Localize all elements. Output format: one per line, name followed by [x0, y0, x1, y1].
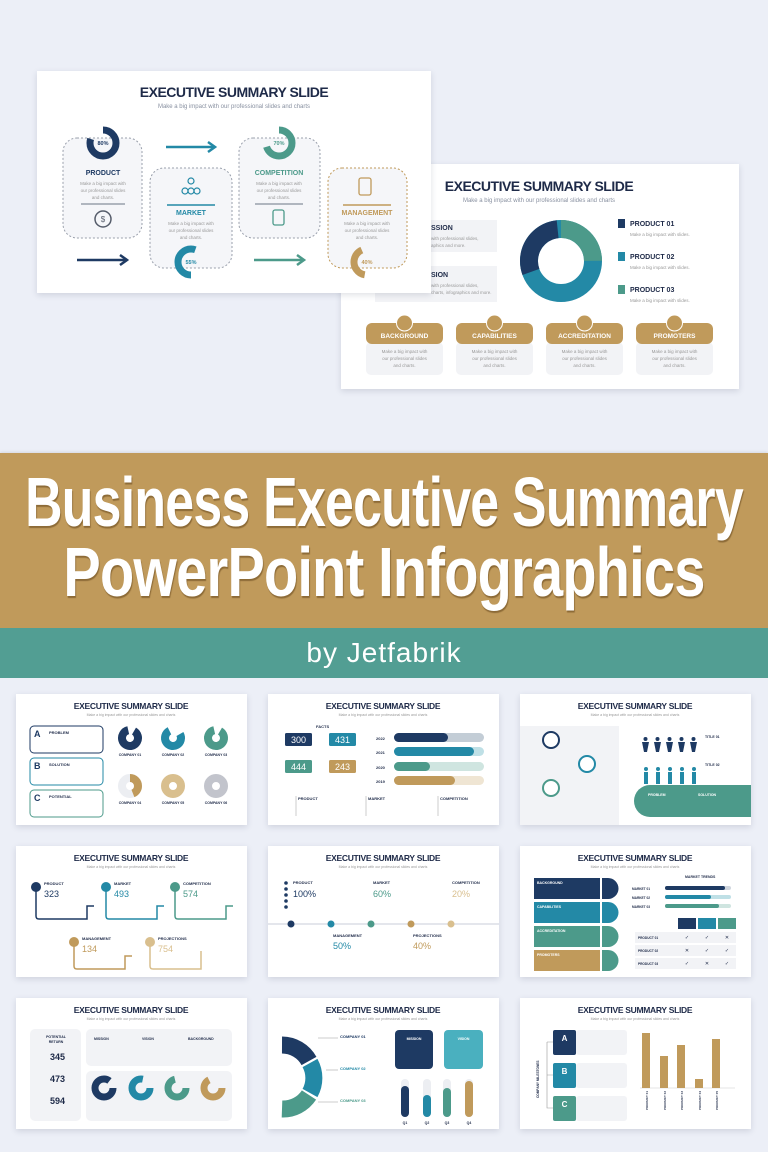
card: market: MARKET [176, 210, 207, 217]
thumbnail 6: colored bars + table: PRODUCT 01 [638, 936, 658, 940]
thumbnail 4: numbers path: 754 [158, 944, 173, 954]
card: market: 55% [185, 260, 197, 266]
banner: title: PowerPoint Infographics [63, 533, 705, 611]
thumbnail 9: milestones + bar chart: A [562, 1034, 568, 1043]
thumbnail 4: numbers path: 134 [82, 944, 97, 954]
legend: PRODUCT 03 [630, 287, 674, 294]
card: management: our professional slides [345, 228, 390, 233]
thumbnail 1: ABC + donuts: POTENTIAL [49, 794, 72, 799]
gold cards: and charts. [393, 363, 416, 368]
thumbnail 1: ABC + donuts: B [34, 761, 41, 771]
thumbnail 7: potential return + donuts: BACKGROUND [188, 1037, 214, 1041]
thumbnail 4: numbers path: COMPETITION [183, 881, 211, 886]
thumbnail 3: people icons: SOLUTION [698, 793, 717, 797]
thumbnail 5: timeline percentages: Make a big impact with our professional slides and charts [339, 865, 428, 869]
thumbnail 7: potential return + donuts: MISSION [94, 1037, 109, 1041]
thumbnail 7: potential return + donuts: RETURN [49, 1040, 64, 1044]
banner: title: Business Executive Summary [25, 463, 743, 541]
card: market [150, 168, 232, 275]
card: product: 80% [97, 141, 109, 147]
thumbnail 3: people icons: PROBLEM [648, 793, 666, 797]
thumbnail 4: numbers path: PRODUCT [44, 881, 64, 886]
thumbnail 2: facts + bars [268, 694, 499, 825]
thumbnail 1: ABC + donuts: COMPANY 01 [119, 753, 141, 757]
thumbnail 2: facts + bars: FACTS [316, 724, 329, 729]
thumbnail 2: facts + bars: 431 [335, 735, 350, 745]
thumbnail 2: facts + bars: MARKET [368, 796, 386, 801]
banner: author: by Jetfabrik [306, 637, 462, 668]
gold cards: our professional slides [562, 356, 608, 361]
arrow: bottom navy [77, 255, 127, 265]
thumbnail 9: milestones + bar chart: B [562, 1067, 568, 1076]
legend [618, 219, 690, 303]
card: product: our professional slides [81, 188, 126, 193]
thumbnail 4: numbers path: PROJECTIONS [158, 936, 187, 941]
thumbnail 5: timeline percentages: COMPETITION [452, 880, 480, 885]
thumbnail 8: half donut + mission/vision + pills: Q1 [403, 1121, 407, 1125]
thumbnail 1: ABC + donuts: PROBLEM [49, 730, 70, 735]
thumbnail 2: facts + bars: 2022 [376, 736, 386, 741]
thumbnail 3: people icons: Make a big impact with our professional slides and charts [591, 713, 680, 717]
card: market: and charts. [180, 235, 202, 240]
thumbnail 1: ABC + donuts: COMPANY 03 [205, 753, 227, 757]
card: market: Make a big impact with [168, 221, 214, 226]
card: product: $ [101, 215, 106, 224]
thumbnail 7: potential return + donuts: 345 [50, 1052, 65, 1062]
card: management: MANAGEMENT [342, 210, 393, 217]
gold cards: our professional slides [382, 356, 428, 361]
thumbnail 7: potential return + donuts [16, 998, 247, 1129]
gold cards: Make a big impact with [562, 349, 608, 354]
thumbnail 2: facts + bars: Make a big impact with our professional slides and charts [339, 713, 428, 717]
thumbnail 1: ABC + donuts: A [34, 729, 41, 739]
gold cards: Make a big impact with [382, 349, 428, 354]
thumbnail 5: timeline percentages: 50% [333, 941, 351, 951]
thumbnail 9: milestones + bar chart: PRODUCT 01 [645, 1091, 649, 1110]
thumbnail 5: timeline percentages [268, 846, 499, 977]
thumbnail 6: colored bars + table: MARKET 01 [632, 887, 650, 891]
card: product: and charts. [92, 195, 114, 200]
mission boxes: SSION [431, 225, 453, 232]
thumbnail 7: potential return + donuts: 594 [50, 1096, 65, 1106]
thumbnail 6: colored bars + table [520, 846, 751, 977]
slide: top right executive summary with donut [341, 164, 739, 389]
donut chart [520, 220, 602, 302]
card: management: Make a big impact with [344, 221, 390, 226]
gold cards: ACCREDITATION [558, 333, 611, 340]
thumbnail 5: timeline percentages: 60% [373, 889, 391, 899]
thumbnail 6: colored bars + table: MARKET TRENDS [685, 875, 716, 879]
thumbnail 8: half donut + mission/vision + pills: VISION [458, 1037, 470, 1041]
thumbnail 4: numbers path: Make a big impact with our professional slides and charts [87, 865, 176, 869]
thumbnail 2: facts + bars: 2021 [376, 750, 386, 755]
thumbnail 9: milestones + bar chart [520, 998, 751, 1129]
thumbnail 6: colored bars + table: PRODUCT 03 [638, 962, 658, 966]
thumbnail 5: timeline percentages: 100% [293, 889, 316, 899]
thumbnail 1: ABC + donuts: COMPANY 02 [162, 753, 184, 757]
thumbnail 6: colored bars + table: ✓ [705, 948, 709, 954]
thumbnail 9: milestones + bar chart: PRODUCT 04 [698, 1091, 702, 1110]
card: competition: our professional slides [257, 188, 302, 193]
thumbnail 6: colored bars + table: MARKET 03 [632, 905, 650, 909]
legend: Make a big impact with slides. [630, 232, 690, 237]
gold cards: BACKGROUND [381, 333, 429, 340]
mission boxes [375, 220, 497, 302]
thumbnail 7: potential return + donuts: VISION [142, 1037, 154, 1041]
thumbnail 1: ABC + donuts: COMPANY 05 [162, 801, 184, 805]
thumbnail 3: people icons [520, 694, 751, 825]
slide title [140, 84, 328, 110]
card: market: our professional slides [169, 228, 214, 233]
thumbnail 5: timeline percentages: MARKET [373, 880, 391, 885]
thumbnail 6: colored bars + table: CAPABILITIES [537, 905, 562, 909]
thumbnail 9: milestones + bar chart: PRODUCT 02 [663, 1091, 667, 1110]
thumbnail 1: ABC + donuts: Make a big impact with our professional slides and charts [87, 713, 176, 717]
gold cards: our professional slides [652, 356, 698, 361]
thumbnail 5: timeline percentages: PROJECTIONS [413, 933, 442, 938]
gold cards: and charts. [573, 363, 596, 368]
thumbnail 7: potential return + donuts: Make a big impact with our professional slides and charts [87, 1017, 176, 1021]
legend: Make a big impact with slides. [630, 265, 690, 270]
thumbnail 2: facts + bars: 444 [291, 762, 306, 772]
thumbnail 9: milestones + bar chart: Make a big impact with our professional slides and charts [591, 1017, 680, 1021]
thumbnail 6: colored bars + table: ✓ [725, 948, 729, 954]
thumbnail 2: facts + bars: EXECUTIVE SUMMARY SLIDE [326, 701, 441, 711]
slide title: Make a big impact with our professional slides and charts [158, 104, 310, 110]
thumbnail 9: milestones + bar chart: PRODUCT 05 [715, 1091, 719, 1110]
thumbnail 2: facts + bars: COMPETITION [440, 796, 468, 801]
mission boxes: charts, infographics and more. [431, 290, 492, 295]
thumbnail 6: colored bars + table: MARKET 02 [632, 896, 650, 900]
slide title: EXECUTIVE SUMMARY SLIDE [445, 178, 633, 194]
thumbnail 4: numbers path: EXECUTIVE SUMMARY SLIDE [74, 853, 189, 863]
card: competition: and charts. [268, 195, 290, 200]
slide title: EXECUTIVE SUMMARY SLIDE [140, 84, 328, 100]
gold cards: and charts. [483, 363, 506, 368]
thumbnail 4: numbers path: 574 [183, 889, 198, 899]
thumbnail 5: timeline percentages: EXECUTIVE SUMMARY SLIDE [326, 853, 441, 863]
thumbnail 6: colored bars + table: ✓ [705, 935, 709, 941]
thumbnail 8: half donut + mission/vision + pills: Q2 [425, 1121, 429, 1125]
mission boxes: with professional slides, [431, 236, 479, 241]
thumbnail 8: half donut + mission/vision + pills: COMPANY 02 [340, 1066, 366, 1071]
card: management [328, 168, 407, 277]
banner: title [0, 453, 768, 628]
thumbnail 6: colored bars + table: ACCREDITATION [537, 929, 566, 933]
thumbnail 3: people icons: TITLE 02 [705, 763, 720, 767]
thumbnail 6: colored bars + table: BACKGROUND [537, 881, 563, 885]
thumbnail 9: milestones + bar chart: PRODUCT 03 [680, 1091, 684, 1110]
card: competition: 70% [273, 141, 285, 147]
thumbnail 3: people icons: TITLE 01 [705, 735, 720, 739]
legend: PRODUCT 02 [630, 254, 674, 261]
mission boxes: with professional slides, [431, 283, 479, 288]
thumbnail 6: colored bars + table: Make a big impact with our professional slides and charts [591, 865, 680, 869]
thumbnail 8: half donut + mission/vision + pills: Q3 [445, 1121, 449, 1125]
card: product [63, 130, 142, 238]
slide title: Make a big impact with our professional slides and charts [463, 198, 615, 204]
slide title [445, 178, 633, 204]
thumbnail 3: people icons: EXECUTIVE SUMMARY SLIDE [578, 701, 693, 711]
thumbnail 4: numbers path: MARKET [114, 881, 132, 886]
thumbnail 4: numbers path: MANAGEMENT [82, 936, 112, 941]
thumbnail 5: timeline percentages: PRODUCT [293, 880, 313, 885]
thumbnail 9: milestones + bar chart: EXECUTIVE SUMMARY SLIDE [578, 1005, 693, 1015]
thumbnail 6: colored bars + table: ✓ [725, 961, 729, 967]
thumbnail 2: facts + bars: 300 [291, 735, 306, 745]
arrow: top teal [166, 142, 215, 152]
thumbnail 4: numbers path: 323 [44, 889, 59, 899]
card: management: 40% [361, 260, 373, 266]
thumbnail 8: half donut + mission/vision + pills: EXECUTIVE SUMMARY SLIDE [326, 1005, 441, 1015]
thumbnail 6: colored bars + table: EXECUTIVE SUMMARY SLIDE [578, 853, 693, 863]
banner: author [0, 628, 768, 678]
thumbnail 5: timeline percentages: MANAGEMENT [333, 933, 363, 938]
thumbnail 1: ABC + donuts: C [34, 793, 41, 803]
card: competition: Make a big impact with [256, 181, 302, 186]
thumbnail 4: numbers path: 493 [114, 889, 129, 899]
thumbnail 2: facts + bars: 243 [335, 762, 350, 772]
thumbnail 7: potential return + donuts: 473 [50, 1074, 65, 1084]
thumbnail 8: half donut + mission/vision + pills: Make a big impact with our professional slides and charts [339, 1017, 428, 1021]
thumbnail 4: numbers path [16, 846, 247, 977]
thumbnail 6: colored bars + table: ✕ [705, 961, 709, 967]
thumbnail 5: timeline percentages: 20% [452, 889, 470, 899]
arrow: bottom teal [254, 255, 304, 265]
card: competition [239, 130, 320, 238]
thumbnail 8: half donut + mission/vision + pills: MISSION [407, 1037, 422, 1041]
thumbnail 6: colored bars + table: ✕ [685, 948, 689, 954]
mission boxes: aphics and more. [431, 243, 466, 248]
thumbnail 6: colored bars + table: PRODUCT 02 [638, 949, 658, 953]
gold cards: PROMOTERS [654, 333, 696, 340]
thumbnail 6: colored bars + table: ✓ [685, 961, 689, 967]
thumbnail 2: facts + bars: 2019 [376, 779, 386, 784]
thumbnail 6: colored bars + table: PROMOTERS [537, 953, 560, 957]
card: competition: COMPETITION [255, 170, 303, 177]
thumbnail 7: potential return + donuts: EXECUTIVE SUMMARY SLIDE [74, 1005, 189, 1015]
mission boxes: SION [431, 272, 448, 279]
card: management: and charts. [356, 235, 378, 240]
thumbnail 5: timeline percentages: 40% [413, 941, 431, 951]
gold cards: CAPABILITIES [472, 333, 517, 340]
legend: PRODUCT 01 [630, 221, 674, 228]
thumbnail 1: ABC + donuts [16, 694, 247, 825]
card: product: Make a big impact with [80, 181, 126, 186]
thumbnail 8: half donut + mission/vision + pills [268, 998, 499, 1129]
gold cards [366, 315, 713, 375]
card: product: PRODUCT [86, 170, 121, 177]
thumbnail 8: half donut + mission/vision + pills: Q4 [467, 1121, 471, 1125]
thumbnail 9: milestones + bar chart: C [562, 1100, 568, 1109]
gold cards: Make a big impact with [652, 349, 698, 354]
gold cards: and charts. [663, 363, 686, 368]
legend: Make a big impact with slides. [630, 298, 690, 303]
thumbnail 9: milestones + bar chart: COMPANY MILESTONES [536, 1060, 540, 1098]
gold cards: Make a big impact with [472, 349, 518, 354]
thumbnail 2: facts + bars: PRODUCT [298, 796, 318, 801]
thumbnail 6: colored bars + table: ✕ [725, 935, 729, 941]
thumbnail 1: ABC + donuts: EXECUTIVE SUMMARY SLIDE [74, 701, 189, 711]
gold cards: our professional slides [472, 356, 518, 361]
thumbnail 6: colored bars + table: ✓ [685, 935, 689, 941]
thumbnail 1: ABC + donuts: SOLUTION [49, 762, 70, 767]
slide: top left executive summary [37, 71, 431, 293]
thumbnail 1: ABC + donuts: COMPANY 06 [205, 801, 227, 805]
thumbnail 8: half donut + mission/vision + pills: COMPANY 03 [340, 1098, 366, 1103]
thumbnail 2: facts + bars: 2020 [376, 765, 386, 770]
thumbnail 8: half donut + mission/vision + pills: COMPANY 01 [340, 1034, 366, 1039]
thumbnail 1: ABC + donuts: COMPANY 04 [119, 801, 141, 805]
thumbnail 7: potential return + donuts: POTENTIAL [46, 1035, 67, 1039]
